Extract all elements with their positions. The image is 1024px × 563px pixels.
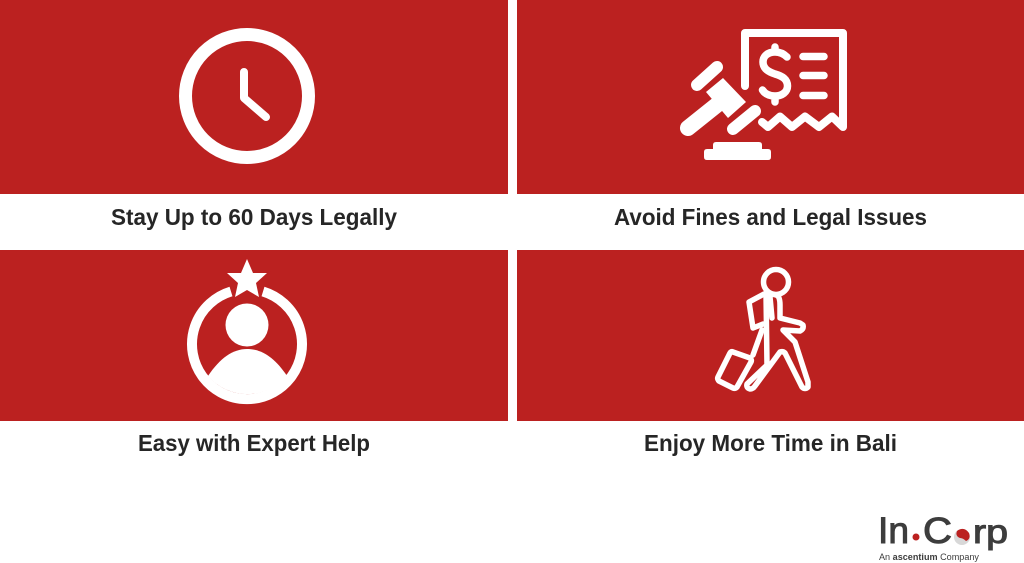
logo: InCorp (878, 510, 1008, 562)
heading: enjoy more time in bali: Enjoy More Time in Bali (644, 430, 897, 456)
panel: easy with expert help (0, 250, 508, 456)
logo tagline: An ascentium Company (879, 552, 979, 562)
icon: traveller with suitcase (718, 270, 808, 389)
logo wordmark: In: In (878, 510, 909, 551)
heading: easy with expert help: Easy with Expert Help (138, 430, 370, 456)
logo wordmark: C: C (923, 510, 952, 551)
panel: enjoy more time (517, 250, 1024, 456)
icon: expert with star (192, 259, 302, 399)
heading: stay up to 60 days legally: Stay Up to 60 Days Legally (111, 204, 397, 230)
panel: stay up to 60 days (0, 0, 508, 230)
icon: clock (186, 34, 308, 158)
heading: avoid fines and legal issues: Avoid Fines and Legal Issues (614, 204, 927, 230)
logo globe (954, 529, 970, 545)
panel: avoid fines (517, 0, 1024, 230)
icon: gavel and receipt (688, 33, 843, 160)
logo dot (912, 534, 920, 540)
logo wordmark: rp: rp (973, 513, 1008, 550)
